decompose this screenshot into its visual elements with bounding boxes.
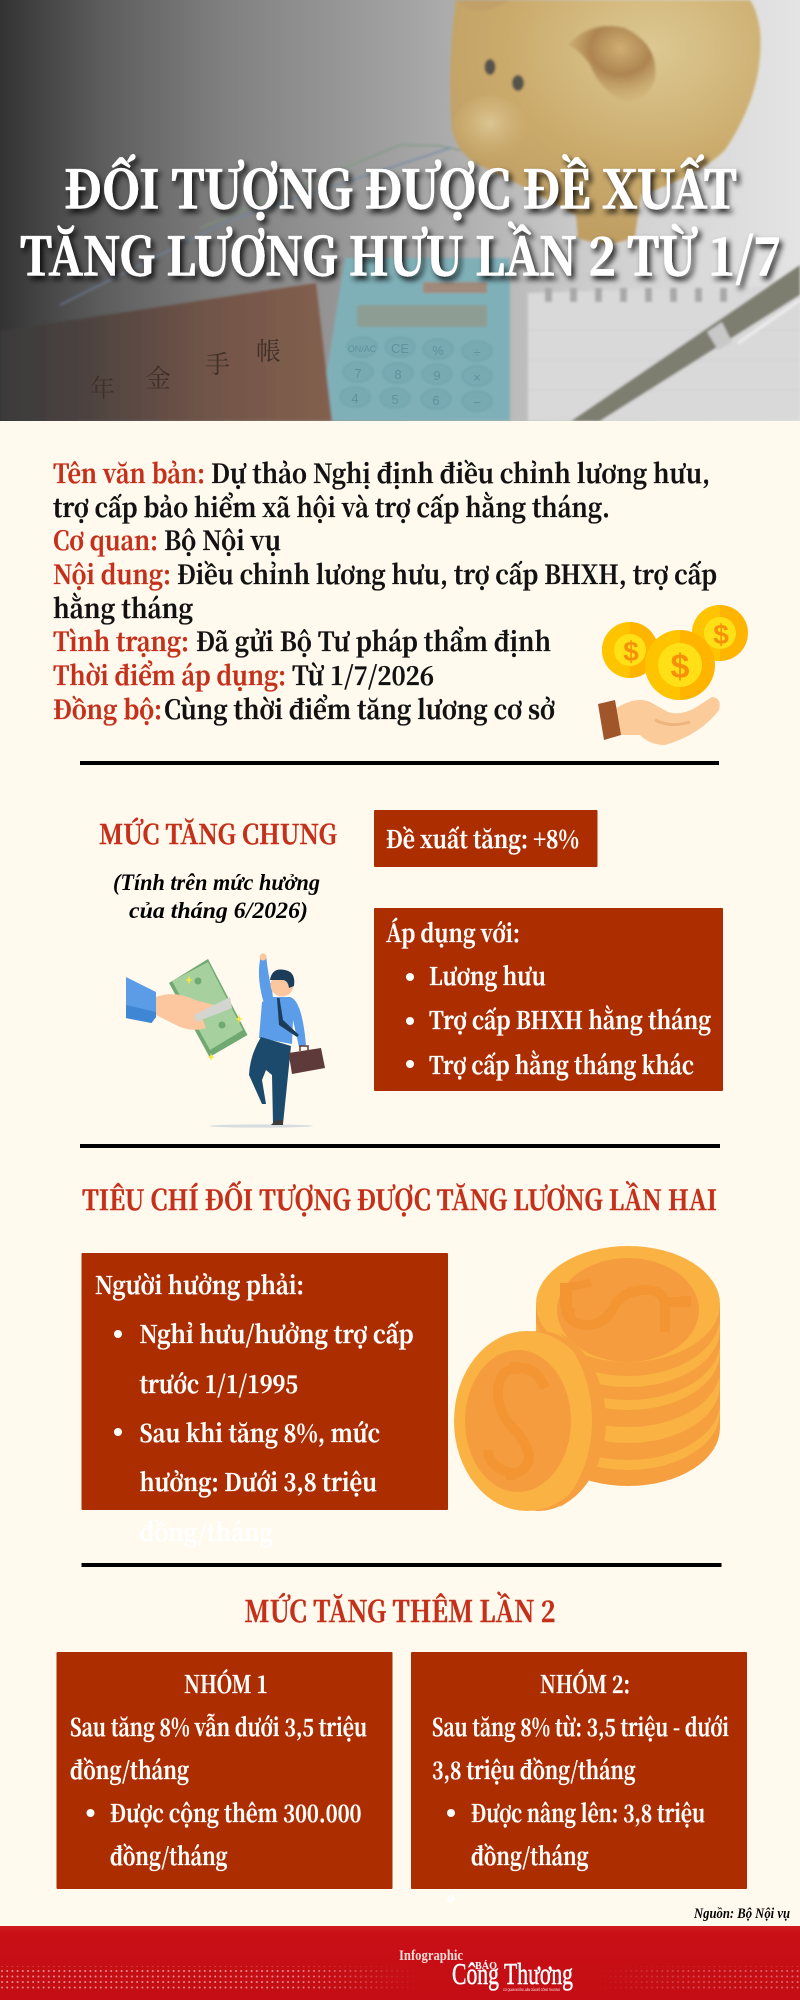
calculator key labels: −: [473, 395, 481, 410]
info text block: trợ cấp bảo hiểm xã hội và trợ cấp hằng tháng.: [53, 488, 610, 525]
panel: nhóm 2: Sau tăng 8% từ: 3,5 triệu - dưới: [432, 1708, 729, 1743]
footer logo: [399, 1948, 573, 1992]
icon: coins over hand: $: [671, 648, 690, 686]
icon: coins over hand: $: [713, 619, 729, 650]
calculator key labels: 8: [394, 367, 402, 382]
panel: nhóm 1: đồng/tháng: [110, 1837, 228, 1872]
box: người hưởng phải: đồng/tháng: [140, 1514, 273, 1549]
info text block: Điều chỉnh lương hưu, trợ cấp BHXH, trợ cấp: [177, 555, 717, 592]
footer band: [0, 1926, 800, 2000]
panel: nhóm 1: [56, 1652, 392, 1889]
illustration: stack of coins: [454, 1246, 720, 1511]
info text block: Cơ quan:: [53, 521, 158, 558]
panel: nhóm 2: NHÓM 2:: [540, 1665, 630, 1700]
calculator key labels: ON/AC: [348, 344, 377, 354]
title: [20, 148, 781, 290]
footer logo: Công Thương: [452, 1956, 573, 1991]
box: người hưởng phải: hưởng: Dưới 3,8 triệu: [140, 1464, 377, 1499]
calculator key labels: 7: [354, 366, 362, 381]
calculator key labels: [348, 344, 480, 405]
box: áp dụng với: Trợ cấp BHXH hằng tháng: [429, 1002, 711, 1037]
note: [113, 870, 320, 923]
info text block: Thời điểm áp dụng:: [53, 656, 286, 693]
book characters: 年金手帳: [90, 332, 281, 405]
panel: nhóm 1: NHÓM 1: [184, 1665, 268, 1700]
info text block: Tình trạng:: [53, 622, 189, 659]
box: người hưởng phải: Sau khi tăng 8%, mức: [140, 1415, 380, 1450]
panel: nhóm 2: đồng/tháng: [471, 1837, 588, 1872]
header banner photo: [0, 0, 800, 421]
box: áp dụng với: Trợ cấp hằng tháng khác: [429, 1047, 694, 1082]
panel: nhóm 1: đồng/tháng: [70, 1751, 189, 1786]
calculator key labels: ×: [473, 370, 481, 385]
info text block: Nội dung:: [53, 555, 171, 592]
icon: coins over hand: $: [623, 636, 639, 667]
calculator key labels: CE: [391, 341, 409, 356]
panel: nhóm 2: 3,8 triệu đồng/tháng: [432, 1751, 636, 1786]
info text block: Đã gửi Bộ Tư pháp thẩm định: [196, 622, 551, 659]
box: áp dụng với: [374, 908, 723, 1091]
info text block: Từ 1/7/2026: [292, 656, 434, 693]
box: đề xuất tăng: [374, 810, 598, 867]
heading: MỨC TĂNG CHUNG: [99, 813, 337, 852]
box: người hưởng phải: Người hưởng phải:: [95, 1267, 304, 1302]
box: áp dụng với: Áp dụng với:: [386, 915, 520, 950]
info text block: [53, 454, 717, 727]
footer logo: Infographic: [399, 1948, 463, 1964]
calculator key labels: 5: [391, 392, 399, 407]
footer logo: CƠ QUAN NGÔN LUẬN CỦA BỘ CÔNG THƯƠNG: [503, 1987, 560, 1992]
panel: nhóm 2: Được nâng lên: 3,8 triệu: [471, 1794, 705, 1829]
calculator key labels: 6: [432, 393, 440, 408]
info text block: Bộ Nội vụ: [164, 521, 281, 558]
panel: mức tăng chung: [99, 810, 723, 1128]
calculator key labels: 4: [351, 391, 359, 406]
panel: nhóm 1: Được cộng thêm 300.000: [110, 1794, 362, 1829]
info text block: Dự thảo Nghị định điều chỉnh lương hưu,: [211, 454, 710, 491]
calculator key labels: %: [432, 343, 444, 358]
info text block: Đồng bộ:: [53, 690, 162, 727]
box: người hưởng phải: Nghỉ hưu/hưởng trợ cấp: [140, 1316, 414, 1351]
info text block: Cùng thời điểm tăng lương cơ sở: [164, 690, 555, 727]
title: ĐỐI TƯỢNG ĐƯỢC ĐỀ XUẤT: [64, 148, 737, 223]
panel: nhóm 1: Sau tăng 8% vẫn dưới 3,5 triệu: [70, 1708, 367, 1743]
panel: nhóm 2: [411, 1652, 747, 1903]
footer logo: BÁO: [475, 1960, 497, 1972]
heading: mức tăng thêm: MỨC TĂNG THÊM LẦN 2: [244, 1589, 556, 1631]
info text block: Tên văn bản:: [53, 454, 205, 491]
illustration: hand giving money to man: [126, 954, 325, 1128]
info text block: hằng tháng: [53, 589, 193, 626]
box: đề xuất tăng: Đề xuất tăng: +8%: [386, 821, 579, 856]
heading: tiêu chí: TIÊU CHÍ ĐỐI TƯỢNG ĐƯỢC TĂNG LƯƠNG LẦN HAI: [82, 1179, 717, 1219]
note: (Tính trên mức hưởng: [113, 870, 320, 895]
box: người hưởng phải: trước 1/1/1995: [140, 1366, 298, 1401]
box: người hưởng phải: [82, 1253, 448, 1549]
calculator key labels: 9: [433, 368, 441, 383]
note: của tháng 6/2026): [129, 898, 308, 923]
calculator key labels: ÷: [473, 345, 481, 360]
icon: coins over hand: [598, 605, 748, 745]
box: áp dụng với: Lương hưu: [429, 958, 546, 993]
